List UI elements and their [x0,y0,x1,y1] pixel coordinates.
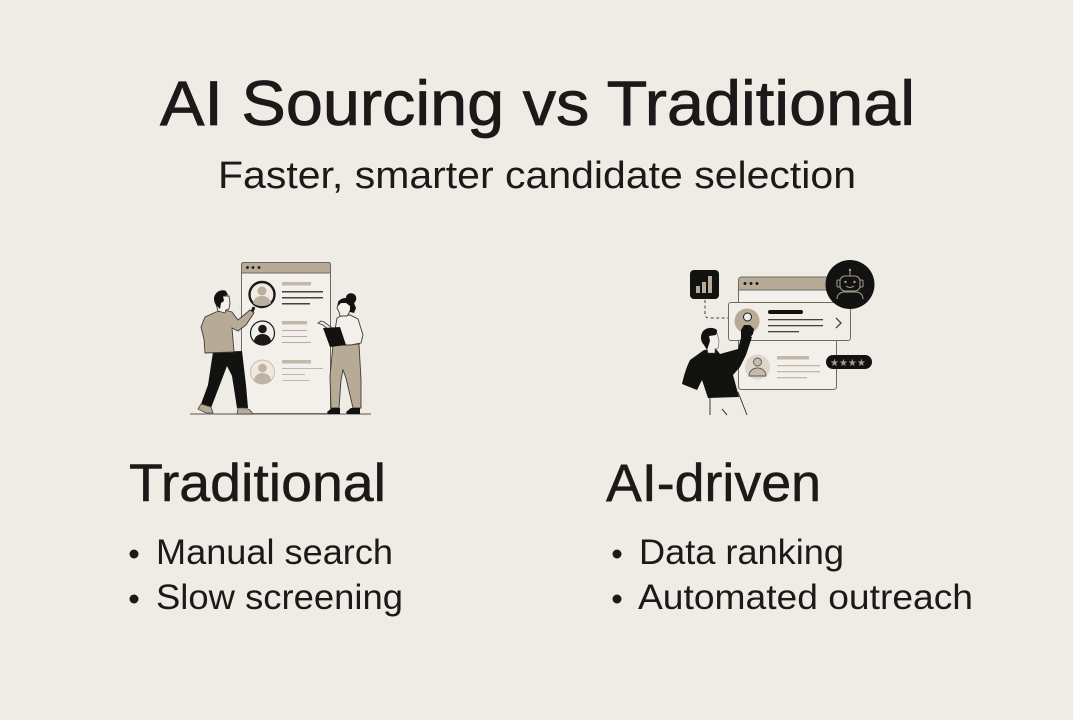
candidate row 3 text [282,360,323,381]
icon: avatar faded [250,360,274,384]
figure: man with magnifier [198,290,254,414]
rating pill with stars [826,355,872,369]
illustration: traditional manual search [190,262,371,414]
dashed connector [705,300,728,318]
candidate row 2 text [282,321,311,343]
highlighted candidate card [728,302,850,340]
illustration: AI-driven ranking [682,260,874,415]
figure: woman with clipboard [318,293,363,414]
figure: person touching card [682,325,754,415]
list: Traditional [130,533,403,617]
ground line [190,413,371,415]
bullet item: Manual search: Manual search [156,533,393,572]
bullet item: Automated outreach: Automated outreach [638,578,973,617]
icon: avatar dark [250,321,274,345]
icon: magnifying glass over avatar [250,282,274,312]
heading: Traditional: Traditional [129,454,386,513]
icon: bar chart badge [690,270,719,299]
icon: robot badge [826,260,874,309]
subtitle: Faster, smarter candidate selection [218,155,856,197]
title: AI Sourcing vs Traditional [160,69,915,139]
list: AI-driven [612,533,973,617]
rating pill with stars: ★★★★ [830,358,866,369]
lower candidate row [745,354,820,380]
back browser window [738,277,836,390]
browser window [242,262,330,414]
heading: AI-driven: AI-driven [606,454,821,513]
bullet item: Data ranking: Data ranking [639,533,844,572]
candidate row 1 text [282,282,323,304]
bullet item: Slow screening: Slow screening [156,578,403,617]
